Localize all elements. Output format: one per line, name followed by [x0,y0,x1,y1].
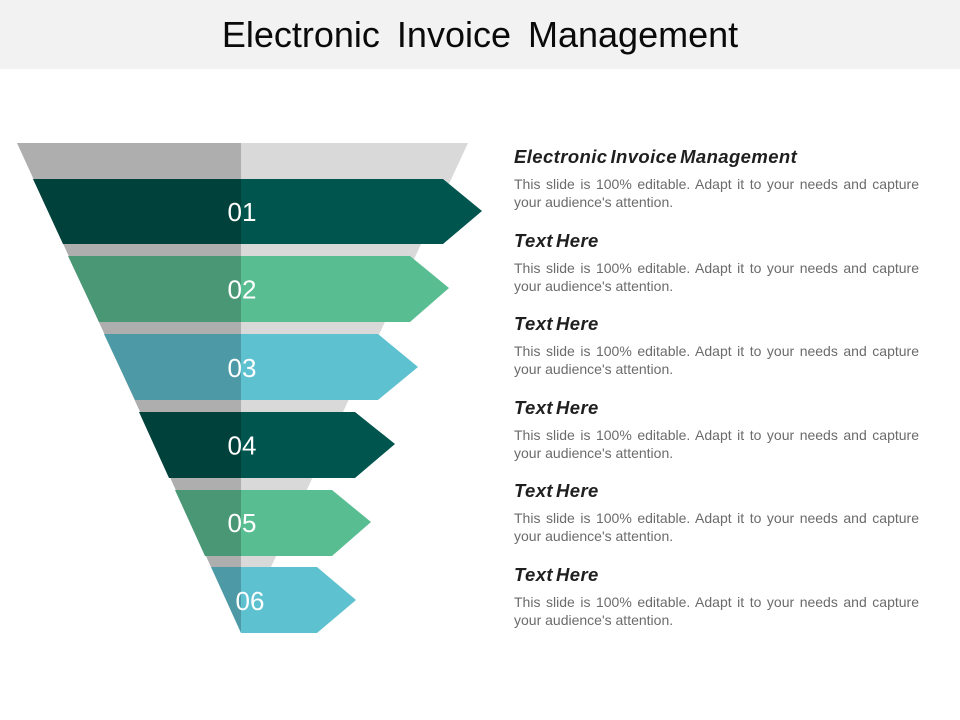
arrow 03 [104,334,418,400]
heading 3: Text Here [514,313,599,334]
text block 2 [514,230,919,294]
arrow 04 [139,412,395,478]
body 5: This slide is 100% editable. Adapt it to your needs and capture your audience's attention. [514,510,919,544]
arrow 03: 03 [228,353,256,383]
text block 1 [514,146,919,210]
body 6: This slide is 100% editable. Adapt it to your needs and capture your audience's attention. [514,594,919,628]
heading 6: Text Here [514,564,599,585]
arrow 05: 05 [228,508,256,538]
heading 2: Text Here [514,230,599,251]
funnel background: grey [17,143,468,567]
title: Electronic Invoice Management [222,14,738,55]
heading 1: Electronic Invoice Management [514,146,797,167]
text block 4 [514,397,919,461]
arrow 05 [175,490,371,556]
arrow 01 [33,179,482,244]
text block 6 [514,564,919,628]
title bar [0,0,960,69]
heading 5: Text Here [514,480,599,501]
body 2: This slide is 100% editable. Adapt it to your needs and capture your audience's attention. [514,260,919,294]
arrow 01: 01 [228,197,256,227]
body 1: This slide is 100% editable. Adapt it to your needs and capture your audience's attention. [514,176,919,210]
text block 3 [514,313,919,377]
text block 5 [514,480,919,544]
arrow 04: 04 [228,430,256,460]
arrow 02: 02 [228,274,256,304]
arrow 02 [68,256,449,322]
arrow 06 [211,567,356,633]
body 3: This slide is 100% editable. Adapt it to your needs and capture your audience's attention. [514,343,919,377]
heading 4: Text Here [514,397,599,418]
arrow 06: 06 [236,586,264,616]
body 4: This slide is 100% editable. Adapt it to your needs and capture your audience's attention. [514,427,919,461]
